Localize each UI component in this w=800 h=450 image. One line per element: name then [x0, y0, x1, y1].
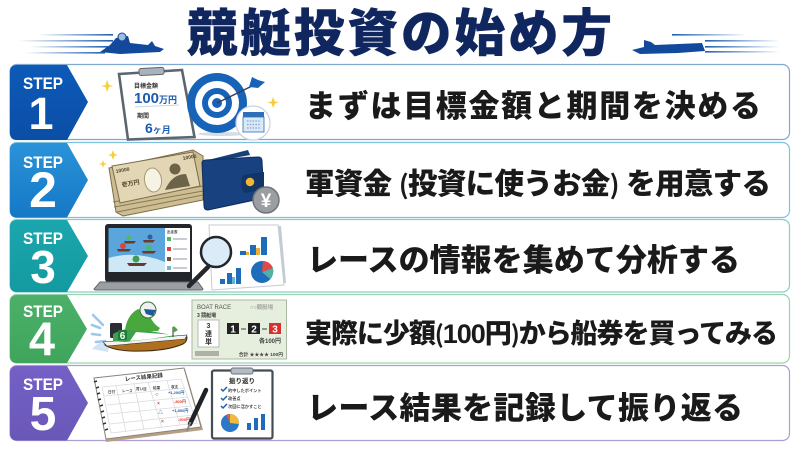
icon: stack of yen banknotes: 10000: [115, 167, 130, 175]
step badge 2: [10, 143, 88, 218]
icon: boat race ticket: 1: [230, 324, 236, 336]
step badge 3: 3: [30, 241, 56, 293]
step badge 5: STEP: [23, 375, 63, 394]
step text 4: 実際に少額(100円)から船券を買ってみる: [305, 315, 778, 350]
icon: race result notebook: -500円: [178, 417, 190, 422]
icon: magnifying glass: [189, 237, 231, 286]
step badge 3: STEP: [23, 229, 63, 248]
panel: step 4: [10, 294, 790, 365]
step badge 5: 5: [30, 388, 56, 441]
icon: race result notebook: 結果: [153, 385, 161, 390]
step badge 1: 1: [28, 88, 54, 139]
icon: race result notebook: レース結果記録: [124, 371, 164, 383]
step badge 2: STEP: [23, 153, 63, 172]
icon: racing boat with rider: [92, 302, 187, 352]
step text 5: レース結果を記録して振り返る: [307, 391, 743, 426]
icon: wallet: [202, 150, 264, 210]
step badge 4: 4: [29, 312, 55, 365]
icon: review clipboard: 振り返り: [229, 376, 255, 385]
icon: calendar: [236, 106, 270, 140]
icon: race result notebook: ○: [155, 392, 159, 398]
icon: race result notebook: +1,200円: [168, 390, 184, 395]
icon: race result notebook: ×: [161, 419, 164, 425]
icon: left racing boat with speed lines: [18, 33, 164, 54]
icon: yen coin: [253, 187, 279, 213]
icon: clipboard with goal amount: 100万円: [134, 90, 177, 107]
icon: race result notebook: 日付: [108, 389, 116, 394]
icon: race result notebook: 収支: [171, 384, 179, 389]
icon: race result notebook: ×: [157, 401, 160, 407]
panel: step 1: [10, 64, 790, 140]
icon: clipboard with goal amount: 期間: [137, 112, 149, 120]
icon: boat race ticket: BOAT RACE: [197, 305, 231, 311]
step text 3: レースの情報を集めて分析する: [307, 243, 740, 278]
icon: racing boat with rider: 6: [120, 331, 126, 342]
step text 2: 軍資金 (投資に使うお金) を用意する: [305, 165, 771, 202]
icon: sparkles: [101, 80, 279, 108]
icon: target with arrow: [187, 73, 265, 136]
icon: analysis charts sheet: [209, 225, 286, 290]
icon: boat race ticket: 単: [205, 337, 212, 346]
icon: pen: [187, 390, 206, 431]
panel: step 3: [10, 220, 790, 293]
icon: clipboard with goal amount: 目標金額: [134, 82, 158, 90]
icon: laptop with race screen: [94, 224, 203, 290]
icon: review clipboard: 的中したポイント: [228, 387, 262, 394]
step badge 4: STEP: [23, 302, 63, 321]
icon: stack of yen banknotes: 壱万円: [121, 178, 140, 189]
step badge 3: [10, 220, 88, 293]
icon: race result notebook: +1,800円: [172, 408, 188, 413]
icon: right racing boat with speed lines: [632, 34, 780, 54]
step badge 2: 2: [29, 162, 57, 218]
step badge 5: [10, 366, 88, 441]
step badge 1: STEP: [23, 74, 63, 93]
icon: review clipboard: [212, 368, 272, 438]
icon: boat race ticket: 3: [207, 323, 211, 330]
icon: boat race ticket: 各100円: [259, 337, 281, 345]
icon: laptop with race screen: 出走表: [167, 229, 178, 234]
icon: stack of yen banknotes: 10000: [182, 154, 197, 162]
icon: race result notebook: [94, 368, 203, 442]
step text 1: まずは目標金額と期間を決める: [305, 89, 761, 124]
title: 競艇投資の始め方: [187, 5, 612, 62]
step badge 4: [10, 295, 87, 365]
icon: race result notebook: 買い目: [136, 386, 147, 391]
icon: boat race ticket: ○○競艇場: [250, 303, 274, 311]
icon: race result notebook: レース: [122, 388, 133, 393]
icon: boat race ticket: 3 競艇場: [197, 312, 216, 319]
icon: review clipboard: 改善点: [228, 395, 241, 402]
icon: race result notebook: -800円: [174, 399, 186, 404]
icon: review clipboard: 次回に活かすこと: [228, 403, 262, 410]
icon: boat race ticket: 合計 ★★★★ 100円: [239, 351, 283, 358]
icon: clipboard with goal amount: [119, 67, 194, 140]
icon: clipboard with goal amount: 6ヶ月: [145, 120, 171, 136]
icon: sparkles: [99, 150, 118, 168]
icon: boat race ticket: 3: [272, 324, 278, 336]
icon: stack of yen banknotes: [109, 150, 203, 216]
panel: step 2: [10, 142, 790, 218]
icon: boat race ticket: 連: [205, 329, 212, 338]
icon: boat race ticket: 2: [251, 324, 257, 336]
icon: yen coin: ¥: [261, 191, 272, 212]
step badge 1: [10, 65, 88, 140]
icon: boat race ticket: [192, 300, 286, 359]
panel: step 5: [10, 366, 790, 442]
icon: race result notebook: △: [158, 409, 163, 416]
